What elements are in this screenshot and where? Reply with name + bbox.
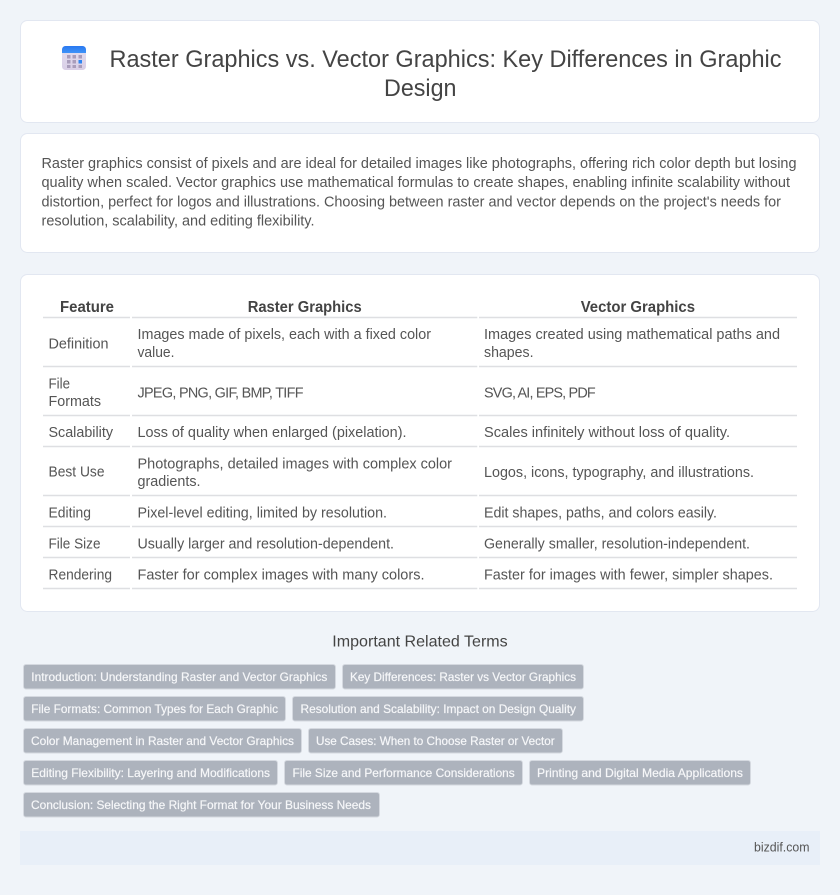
tag: key differences xyxy=(342,664,584,689)
row: rendering: Faster for complex images with many colors. xyxy=(138,567,424,583)
footer bar: bizdif.com xyxy=(754,840,810,855)
panel: introduction text: quality when scaled. Vector graphics use mathematical formulas to create shapes, enabling infinite scalability without xyxy=(42,175,790,191)
row: scalability: Loss of quality when enlarged (pixelation). xyxy=(138,425,406,441)
row: rendering xyxy=(43,567,797,588)
row: file formats xyxy=(43,376,797,416)
panel: introduction text: Raster graphics consist of pixels and are ideal for detailed images like photographs, offering rich color depth but losing xyxy=(42,156,796,172)
row: file size: File Size xyxy=(48,536,100,552)
row: scalability: Scalability xyxy=(48,425,114,441)
row: best use: Best Use xyxy=(48,465,104,481)
tag: editing flexibility xyxy=(24,760,278,785)
icon: calendar xyxy=(62,46,86,70)
panel: introduction text xyxy=(20,134,820,252)
title xyxy=(110,46,782,102)
row: scalability xyxy=(43,425,797,446)
row: definition: Definition xyxy=(48,336,108,352)
row: rendering: Rendering xyxy=(48,567,112,583)
tags: related terms xyxy=(24,664,750,817)
row: best use: Photographs, detailed images with complex color xyxy=(138,456,452,472)
table header row xyxy=(43,299,797,318)
row: scalability: Scales infinitely without loss of quality. xyxy=(484,425,730,441)
tag: printing and digital media: Printing and Digital Media Applications xyxy=(537,766,743,780)
tag: resolution and scalability xyxy=(292,696,584,721)
row: file size: Usually larger and resolution-dependent. xyxy=(138,536,394,552)
tag: resolution and scalability: Resolution and Scalability: Impact on Design Quality xyxy=(300,702,576,716)
table header row: Vector Graphics xyxy=(581,299,695,316)
row: definition: value. xyxy=(138,345,174,361)
tag: color management xyxy=(24,728,302,753)
row: best use xyxy=(43,456,797,496)
tag: use cases: Use Cases: When to Choose Raster or Vector xyxy=(316,734,555,748)
title: Design xyxy=(384,75,456,102)
row: file formats: JPEG, PNG, GIF, BMP, TIFF xyxy=(138,385,304,401)
row: file formats: File xyxy=(48,376,70,392)
footer bar xyxy=(20,831,820,865)
row: file formats: SVG, AI, EPS, PDF xyxy=(484,385,596,401)
tag: introduction: Introduction: Understanding Raster and Vector Graphics xyxy=(31,670,327,684)
tag: color management: Color Management in Raster and Vector Graphics xyxy=(31,734,294,748)
tag: file size and performance xyxy=(284,760,522,785)
row: rendering: Faster for images with fewer, simpler shapes. xyxy=(484,567,773,583)
row: editing xyxy=(43,505,797,526)
row: editing: Editing xyxy=(48,505,91,521)
tag: key differences: Key Differences: Raster vs Vector Graphics xyxy=(350,670,576,684)
tag: editing flexibility: Editing Flexibility: Layering and Modifications xyxy=(31,766,270,780)
tag: introduction xyxy=(24,664,336,689)
panel: comparison table xyxy=(20,274,820,612)
row: definition: Images created using mathematical paths and xyxy=(484,327,780,343)
table header row: Raster Graphics xyxy=(248,299,362,316)
row: definition: Images made of pixels, each with a fixed color xyxy=(138,327,431,343)
row: editing: Pixel-level editing, limited by resolution. xyxy=(138,505,387,521)
table header row: Feature xyxy=(60,299,114,316)
row: file size xyxy=(43,536,797,558)
row: best use: Logos, icons, typography, and illustrations. xyxy=(484,465,754,481)
row: editing: Edit shapes, paths, and colors easily. xyxy=(484,505,717,521)
tag: file formats xyxy=(24,696,286,721)
panel: header xyxy=(20,20,820,122)
row: file formats: Formats xyxy=(48,394,101,410)
row: definition: shapes. xyxy=(484,345,534,361)
row: best use: gradients. xyxy=(138,474,200,490)
panel: introduction text: resolution, scalability, and editing flexibility. xyxy=(42,214,314,230)
tag: use cases xyxy=(308,728,562,753)
tag: file size and performance: File Size and Performance Considerations xyxy=(292,766,515,780)
row: file size: Generally smaller, resolution-independent. xyxy=(484,536,750,552)
title: Raster Graphics vs. Vector Graphics: Key Differences in Graphic xyxy=(110,46,782,73)
tag: conclusion: Conclusion: Selecting the Right Format for Your Business Needs xyxy=(31,798,371,812)
tag: file formats: File Formats: Common Types for Each Graphic xyxy=(31,702,278,716)
row: definition xyxy=(43,327,797,366)
panel: introduction text: distortion, perfect for logos and illustrations. Choosing between raster and vector depends on the project's needs for xyxy=(42,194,781,210)
tag: conclusion xyxy=(24,792,380,817)
tag: printing and digital media xyxy=(530,760,750,785)
heading: important related terms: Important Related Terms xyxy=(332,634,508,651)
